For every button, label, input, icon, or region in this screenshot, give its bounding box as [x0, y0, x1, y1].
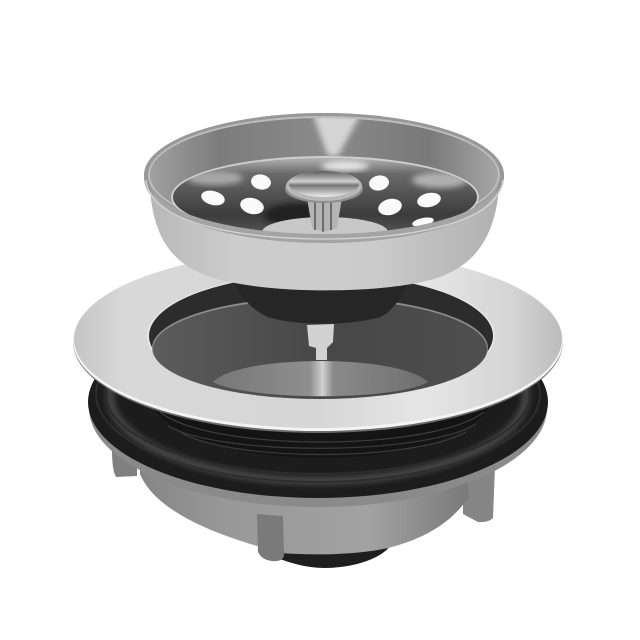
drain body: grey plastic housing — [89, 309, 547, 568]
basket floor — [171, 156, 479, 238]
knob — [285, 171, 363, 232]
rim — [144, 113, 504, 243]
stem — [307, 324, 334, 360]
drain holes — [200, 173, 442, 228]
opening — [147, 273, 495, 399]
strainer rubber stopper — [233, 278, 409, 324]
basin floor — [213, 361, 428, 396]
left tab — [112, 450, 137, 477]
right tab — [463, 466, 495, 522]
rim front edge — [149, 178, 499, 243]
threaded neck — [150, 332, 492, 458]
illustration: sink drain strainer assembly — [73, 113, 563, 568]
wall highlight wedge — [311, 118, 362, 156]
strainer basket — [144, 112, 504, 290]
lower bowl — [140, 462, 468, 554]
grey flange — [89, 309, 547, 507]
central cone — [262, 217, 388, 234]
center rib — [257, 514, 284, 561]
rubber gasket — [88, 379, 548, 498]
flange ring — [73, 250, 563, 433]
cup body — [150, 190, 499, 290]
black outlet — [277, 546, 390, 568]
